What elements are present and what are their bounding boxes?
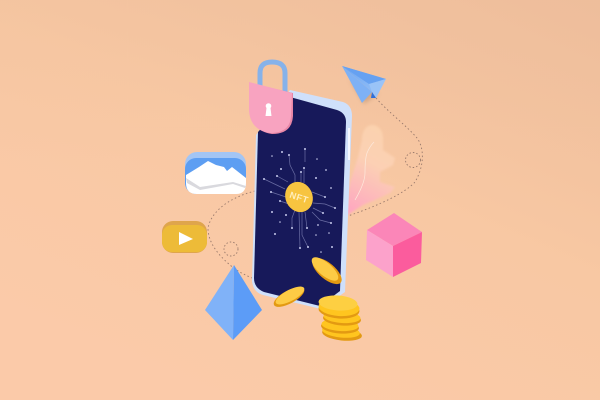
- keyhole: [266, 103, 272, 116]
- video play button: [162, 221, 207, 253]
- circuit dots: [263, 148, 336, 253]
- pink cube: [366, 213, 422, 277]
- NFT label: NFT: [288, 190, 310, 205]
- side button: [348, 128, 350, 160]
- coin stack: [318, 294, 363, 343]
- phone body: [252, 90, 352, 309]
- lock body shadow: [250, 83, 293, 134]
- dashed circle: right: [406, 152, 420, 168]
- dashed path: image card to diamond: [208, 191, 255, 278]
- decorative pink blob: [346, 125, 395, 216]
- falling coin right: [308, 253, 346, 289]
- ethereum diamond: [205, 265, 262, 340]
- paper plane: [342, 66, 386, 104]
- padlock: [249, 62, 293, 134]
- dashed circle: left: [224, 242, 238, 256]
- NFT gold coin: [280, 177, 318, 217]
- play triangle: [179, 232, 193, 245]
- phone screen: [254, 97, 346, 306]
- dashed path: paper plane to phone: [348, 98, 422, 216]
- circuit lines: [264, 149, 335, 248]
- image card icon: [185, 152, 246, 194]
- lock body: [249, 82, 292, 133]
- smartphone: [252, 90, 352, 309]
- lock shackle: [260, 62, 285, 94]
- falling coin left: [271, 283, 307, 311]
